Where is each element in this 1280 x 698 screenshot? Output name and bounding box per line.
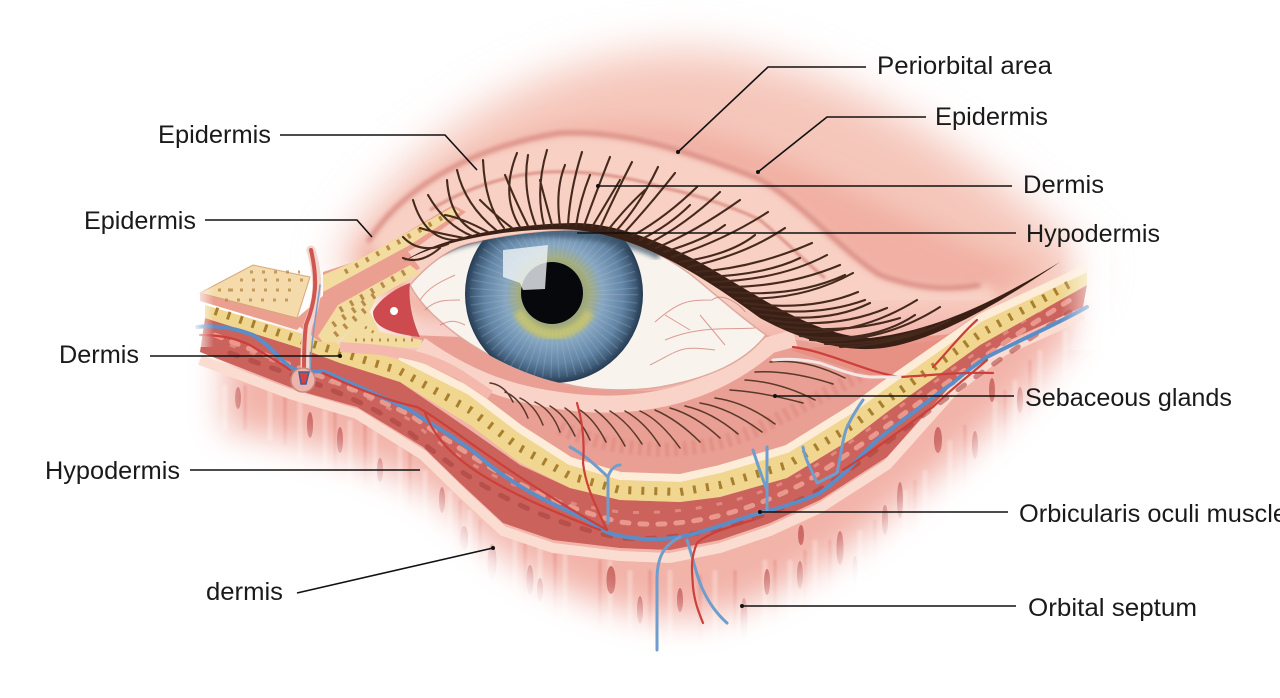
icon: upper eyelashes [403,150,950,347]
label: Epidermis upper right [756,103,1048,174]
label: Dermis right [596,171,1104,199]
label: Epidermis left [84,207,372,237]
panel: yellow fat layer [205,268,1087,502]
label: Orbicularis oculi muscle: Orbicularis oculi muscle [1019,500,1280,528]
blue branches [570,400,863,650]
main vein [197,307,1087,539]
pale line above fat [400,268,1087,478]
label: Epidermis upper left [158,121,477,170]
palpebral vessel [773,359,900,377]
lid mucosa texture [560,375,860,449]
pupil [521,262,583,324]
dark red capillary ovals [235,378,1023,642]
panel: orbicularis muscle layer [200,285,1087,558]
pale vertical fibres [225,330,1065,640]
label: Dermis left [59,341,342,369]
cell rows [215,300,1070,524]
arteries [200,320,993,623]
outer crease [368,133,980,288]
iris assembly [442,230,663,383]
icon: lower eyelashes [490,361,845,448]
label: Hypodermis left: Hypodermis [45,457,180,485]
conjunctival veins [420,275,755,365]
iris disc [465,230,643,383]
inner crease [430,172,825,278]
panel: upper periorbital skin [335,50,1090,345]
label: Epidermis upper right: Epidermis [935,103,1048,131]
icon: upper eyelid margin [403,223,1060,349]
label: Hypodermis right: Hypodermis [1026,220,1160,248]
top lid shadow [440,232,660,255]
darker fibres [245,360,1030,640]
vertical vein [310,285,320,370]
follicle core [299,372,309,384]
left edge fade [192,285,214,347]
iris fibres [494,234,614,354]
label: Sebaceous glands [773,384,1232,412]
label: dermis lower left [206,546,495,606]
icon: blood vessels [197,250,1087,650]
label: Orbital septum [740,594,1197,622]
label: Dermis right: Dermis [1023,171,1104,199]
icon: eye [373,230,767,390]
label: Periorbital area: Periorbital area [877,52,1052,80]
right edge fade [1060,240,1110,350]
label: Orbital septum: Orbital septum [1028,594,1197,622]
vertical artery [304,250,315,370]
yellow ring [518,312,590,335]
pale border under muscle [200,315,1083,558]
panel: inner corner fat bands [297,205,490,395]
panel: lower connective tissue [204,304,1086,639]
label: Orbicularis oculi muscle [758,500,1280,528]
caruncle [373,283,420,337]
label: Sebaceous glands: Sebaceous glands [1025,384,1232,412]
panel: lower eyelid [410,295,1005,475]
fat dots [215,281,1075,492]
eyelid bulge [368,134,1000,345]
label: dermis lower left: dermis [206,578,283,606]
label: Dermis left: Dermis [59,341,139,369]
vertical vessel sheath [305,250,317,370]
follicle [291,368,315,392]
label: Epidermis upper left: Epidermis [158,121,271,149]
label: Epidermis left: Epidermis [84,207,196,235]
panel: skin block [200,265,345,330]
label: Periorbital area [676,52,1052,154]
caruncle highlight [390,307,398,315]
sclera [410,230,766,390]
iris highlight [503,245,548,290]
